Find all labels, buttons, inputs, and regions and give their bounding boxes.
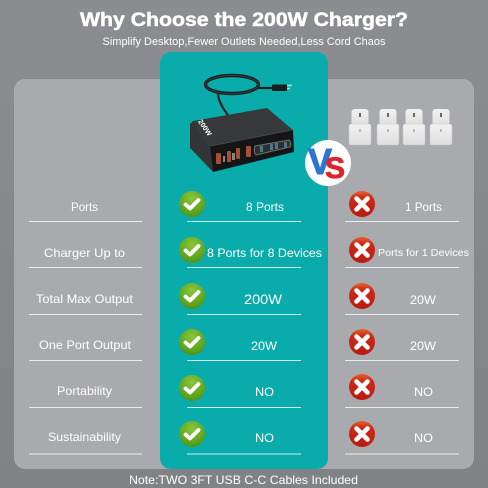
check icons bbox=[179, 191, 205, 447]
icon: VS badge: V bbox=[308, 141, 332, 182]
row labels: Total Max Output bbox=[36, 292, 134, 306]
cross icons bbox=[349, 191, 375, 447]
charger column values: 8 Ports bbox=[246, 200, 284, 214]
row dividers bbox=[29, 222, 459, 454]
row labels: Ports bbox=[71, 200, 98, 214]
single charger column values: 1 Ports bbox=[405, 200, 442, 214]
single charger column values: 20W bbox=[410, 293, 437, 307]
title: Why Choose the 200W Charger? bbox=[80, 9, 408, 31]
icon: VS badge bbox=[305, 140, 351, 186]
single charger column values: 20W bbox=[410, 339, 437, 353]
subtitle: Simplify Desktop,Fewer Outlets Needed,Less Cord Chaos bbox=[102, 36, 386, 48]
row labels: Sustainability bbox=[48, 430, 121, 444]
icon: 200W charger with cord: 200W bbox=[196, 119, 213, 138]
footnote: Note:TWO 3FT USB C-C Cables Included bbox=[129, 473, 358, 487]
charger column values: 20W bbox=[251, 339, 278, 353]
row labels: One Port Output bbox=[39, 338, 132, 352]
charger column values: NO bbox=[255, 431, 274, 445]
icon: 200W charger with cord bbox=[190, 76, 294, 172]
panel: 200W charger column bbox=[160, 52, 328, 469]
icon: VS badge: S bbox=[325, 152, 345, 185]
single charger column values: NO bbox=[414, 385, 433, 399]
charger column values: NO bbox=[255, 385, 274, 399]
panel: comparison background bbox=[14, 79, 474, 469]
single charger column values bbox=[378, 200, 469, 445]
row labels: Portability bbox=[57, 384, 112, 398]
single charger column values: NO bbox=[414, 431, 433, 445]
single charger column values: Ports for 1 Devices bbox=[378, 247, 469, 259]
row labels bbox=[36, 200, 134, 444]
charger column values: 8 Ports for 8 Devices bbox=[207, 246, 322, 260]
row labels: Charger Up to bbox=[44, 246, 125, 260]
charger column values: 200W bbox=[244, 291, 283, 307]
charger column values bbox=[207, 200, 322, 445]
icon: four single-port chargers bbox=[349, 109, 452, 145]
